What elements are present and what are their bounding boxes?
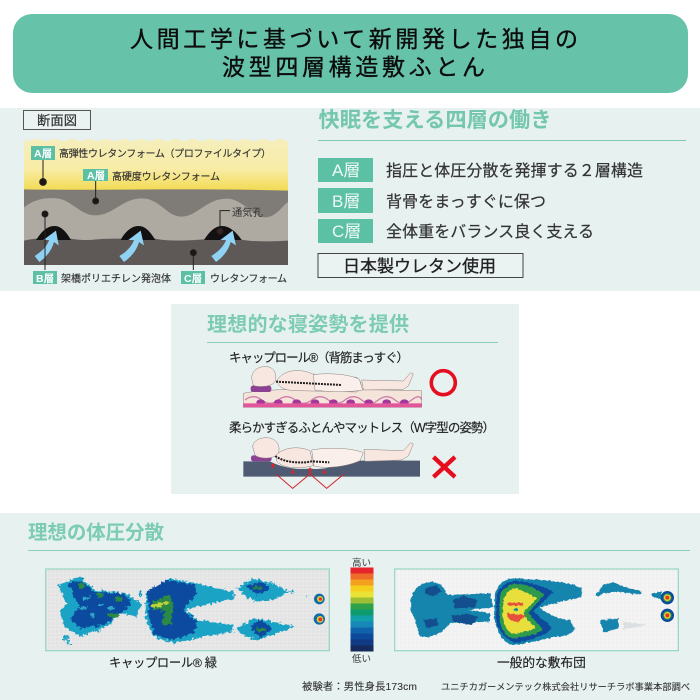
cross-section label <box>24 110 90 130</box>
note: source: ユニチカガーメンテック株式会社リサーチラボ事業本部調べ <box>441 681 690 692</box>
layer label: C urethane: C層 <box>184 273 202 285</box>
layer label: A high elastic urethane <box>31 146 271 160</box>
row: B layer: 背骨をまっすぐに保つ <box>386 193 546 211</box>
layer label: B polyethylene foam: 架橋ポリエチレン発泡体 <box>61 272 171 285</box>
row: C layer: C層 <box>332 222 361 241</box>
illustration: body sinking in soft mattress <box>243 438 420 488</box>
row: C layer <box>318 219 594 243</box>
layer label: A high hardness urethane: A層 <box>87 170 105 182</box>
icon: red cross (bad) <box>434 457 455 477</box>
heading: four layers: 快眠を支える四層の働き <box>318 108 552 132</box>
icon: red circle (good) <box>431 371 455 395</box>
caption: ordinary futon: 一般的な敷布団 <box>497 655 586 670</box>
caption: cap roll: キャップロール® 緑 <box>109 656 217 670</box>
row: B layer: B層 <box>332 192 360 211</box>
heatmap: ordinary futon <box>395 569 678 651</box>
heatmap: cap roll <box>46 569 329 651</box>
caption: good posture: キャップロール®（背筋まっすぐ） <box>229 350 409 365</box>
panel: ideal sleeping posture <box>171 304 519 494</box>
heading: pressure: 理想の体圧分散 <box>28 522 164 544</box>
badge: made in Japan urethane <box>318 254 523 278</box>
layer label: B polyethylene foam: B層 <box>36 273 54 285</box>
badge: made in Japan urethane: 日本製ウレタン使用 <box>343 256 496 276</box>
note: test subject: 被験者：男性身長173cm <box>302 680 417 693</box>
heading: posture: 理想的な寝姿勢を提供 <box>207 313 409 336</box>
title banner <box>13 14 688 93</box>
panel: four-layer structure <box>0 108 700 291</box>
layer label: C urethane <box>181 271 287 285</box>
colour scale legend: 低い <box>352 653 371 665</box>
colour scale legend: 高い <box>352 557 371 569</box>
layer label: A high elastic urethane: A層 <box>34 148 52 160</box>
title banner: 人間工学に基づいて新開発した独自の <box>130 26 578 52</box>
row: A layer: A層 <box>332 161 360 180</box>
layer label: A high elastic urethane: 高弾性ウレタンフォーム（プロファイルタイプ） <box>59 147 271 160</box>
row: B layer <box>318 188 546 213</box>
row: A layer: 指圧と体圧分散を発揮する２層構造 <box>386 162 643 180</box>
label: ventilation hole: 通気孔 <box>232 206 263 219</box>
colour scale legend <box>350 557 374 665</box>
title banner: 波型四層構造敷ふとん <box>222 54 485 80</box>
layer label: A high hardness urethane <box>83 169 220 183</box>
row: A layer <box>318 158 643 182</box>
layer label: A high hardness urethane: 高硬度ウレタンフォーム <box>112 170 220 183</box>
panel: ideal pressure distribution <box>0 513 700 700</box>
row: C layer: 全体重をバランス良く支える <box>386 223 594 241</box>
leader lines and dots <box>40 160 230 270</box>
caption: bad posture: 柔らかすぎるふとんやマットレス（W字型の姿勢） <box>229 420 495 435</box>
cross-section diagram <box>24 139 293 270</box>
arrows: airflow <box>35 231 236 262</box>
illustration: body on cap roll mattress <box>243 367 422 407</box>
layer label: C urethane: ウレタンフォーム <box>210 273 287 285</box>
cross-section label: 断面図 <box>37 113 77 128</box>
layer label: B polyethylene foam <box>33 271 171 285</box>
